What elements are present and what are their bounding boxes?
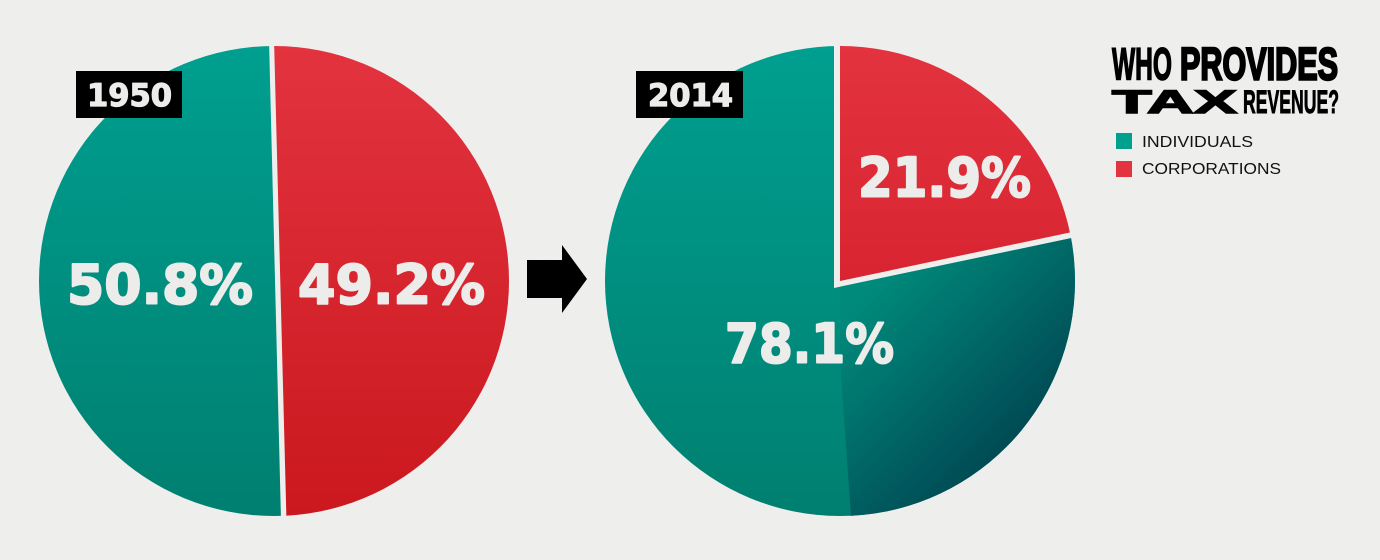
slice: individuals 2014 shaded wedge <box>840 238 1075 516</box>
label: 50.8%: 50.8% <box>67 254 253 316</box>
label: 49.2%: 49.2% <box>298 254 485 316</box>
panel: 2014 pie chart <box>605 46 1075 516</box>
label: 21.9%: 21.9% <box>858 146 1031 210</box>
slice: individuals 2014 <box>605 46 1075 516</box>
title <box>1112 38 1339 120</box>
slice: corporations 2014 <box>840 46 1070 281</box>
legend item: corporations: CORPORATIONS <box>1142 161 1281 178</box>
year tag: 1950 <box>76 71 182 118</box>
legend <box>1116 133 1281 178</box>
title: TAX <box>1112 84 1238 120</box>
panel: 1950 pie chart <box>39 46 509 516</box>
legend item: individuals: INDIVIDUALS <box>1142 134 1253 151</box>
year tag: 2014 <box>636 71 743 118</box>
year tag: 2014: 2014 <box>648 78 733 114</box>
label: 78.1%: 78.1% <box>725 312 894 376</box>
arrow <box>527 245 587 313</box>
slice: individuals 1950 <box>39 46 281 516</box>
slice: corporations 1950 <box>274 46 509 516</box>
legend item: individuals <box>1116 133 1253 151</box>
year tag: 1950: 1950 <box>87 78 172 114</box>
title: WHO <box>1112 38 1172 90</box>
